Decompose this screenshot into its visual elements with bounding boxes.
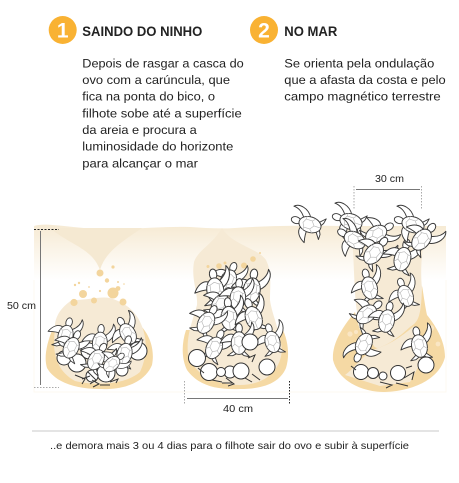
number badge 2: 2 xyxy=(258,20,270,42)
step 1 body text: luminosidade do horizonte xyxy=(82,140,233,154)
dimension: 40 cm xyxy=(184,381,290,415)
dark bowl xyxy=(183,328,288,389)
hatchlings nest 3 and surfacing turtles xyxy=(284,201,448,388)
funnel xyxy=(50,228,142,270)
turtles xyxy=(284,204,328,247)
nest 3: sand chamber xyxy=(333,236,445,392)
dimension: 30 cm xyxy=(354,173,422,209)
turtles xyxy=(206,255,250,299)
light column xyxy=(352,236,425,348)
turtles xyxy=(45,312,84,352)
nest 1: sand chamber xyxy=(46,228,153,389)
step 2 body text: que a afasta da costa e pelo xyxy=(284,73,446,87)
step 1 body text: para alcançar o mar xyxy=(82,156,198,170)
number badge 1 xyxy=(49,16,77,44)
dark bowl xyxy=(333,286,445,392)
step 2 heading xyxy=(250,16,338,44)
step 1 heading xyxy=(49,16,202,44)
dimension: 40 cm: 40 cm xyxy=(223,403,253,415)
eggshell fragments xyxy=(75,372,118,387)
step 1 body text: Depois de rasgar a casca do xyxy=(82,56,244,70)
eggs xyxy=(354,357,434,380)
dimension: 50 cm: 50 cm xyxy=(7,300,36,312)
nest 2: sand chamber xyxy=(183,228,288,389)
dimension: 30 cm: 30 cm xyxy=(375,173,404,185)
step 2 body text xyxy=(284,56,446,104)
eggshell fragments xyxy=(198,355,260,386)
dark bowl xyxy=(46,325,153,389)
heading: no mar: NO MAR xyxy=(284,24,338,39)
sand band xyxy=(34,225,446,280)
step 2 body text: campo magnético terrestre xyxy=(284,90,441,104)
heading: saindo do ninho: SAINDO DO NINHO xyxy=(82,24,202,39)
hatchlings nest 2 xyxy=(183,255,290,386)
light body xyxy=(188,228,282,385)
step 1 body text: fica na ponta do bico, o xyxy=(82,90,215,104)
step 2 body text: Se orienta pela ondulação xyxy=(284,56,434,70)
step 1 body text xyxy=(82,56,244,170)
eggs xyxy=(188,334,275,380)
step 1 body text: da areia e procura a xyxy=(82,123,197,137)
footer note: ..e demora mais 3 ou 4 dias para o filhote sair do ovo e subir à superfície xyxy=(50,440,409,452)
light body xyxy=(54,297,146,384)
pale bubbles xyxy=(347,325,440,346)
sand clumps xyxy=(206,252,261,269)
sand clumps and bubbles xyxy=(70,265,126,306)
step 1 body text: ovo com a carúncula, que xyxy=(82,73,230,87)
eggshell fragments xyxy=(351,366,414,388)
number badge 1: 1 xyxy=(57,20,69,42)
hatchlings nest 1 xyxy=(45,309,147,387)
step 1 body text: filhote sobe até a superfície xyxy=(82,106,242,120)
eggs xyxy=(57,342,147,382)
